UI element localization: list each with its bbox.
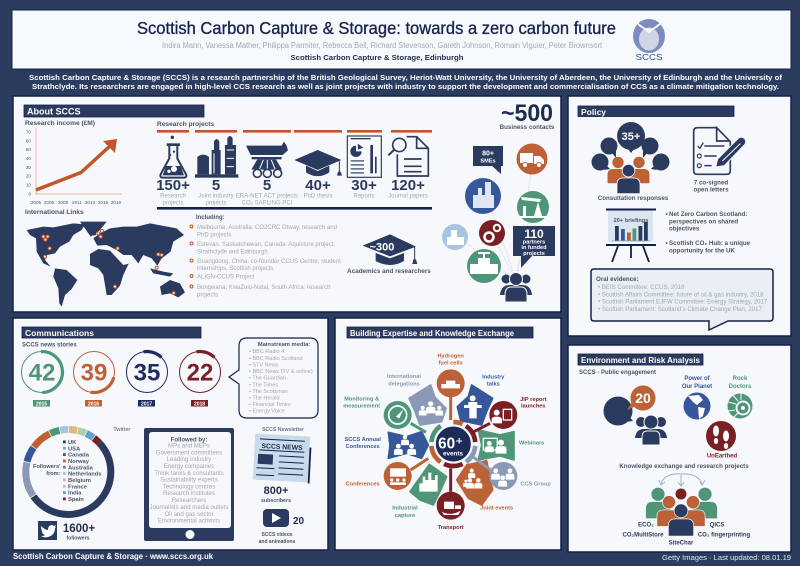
label: news stories: SCCS news stories	[22, 342, 77, 348]
icon: Rock Doctors ammonite: Rock	[733, 376, 748, 382]
petals	[388, 385, 514, 505]
stat: business contacts: Business contacts	[500, 124, 555, 131]
icon: project team	[646, 488, 717, 536]
intro text: Scottish Carbon Capture & Storage (SCCS) is a research partnership of the British Geological Survey, Heriot-Watt University, the University of Aberdeen, the University of Edinburgh and the University of	[29, 73, 782, 82]
labels: research projects: CO₂ fingerprinting	[698, 532, 750, 538]
caption: videos: and animations	[259, 539, 296, 545]
research project numbers and labels: CO₂ SAPLING PCI	[242, 200, 293, 206]
research project numbers and labels: 30+	[351, 177, 377, 194]
news stat 2017: 2017	[141, 401, 152, 407]
research project numbers and labels	[156, 177, 428, 206]
legend: followers by country: from:	[46, 471, 61, 477]
heading: Communications	[22, 327, 201, 338]
label: knowledge exchange: Knowledge exchange and research projects	[619, 463, 749, 470]
icon: tablet with followed-by list	[144, 428, 234, 541]
callout: mainstream media: Mainstream media:	[258, 342, 310, 348]
footer left: source link: Scottish Carbon Capture & Storage · www.sccs.org.uk	[13, 552, 214, 561]
node labels: Transport	[438, 525, 464, 531]
icon: consultation bubbles: 35+	[622, 131, 640, 143]
caption: videos: SCCS videos	[261, 532, 293, 538]
icon: ship and platform	[246, 142, 288, 177]
panel: Policy	[568, 96, 791, 336]
icon: academics cap with count	[347, 234, 431, 275]
line chart: research income: 2015	[98, 200, 109, 205]
text block: including links: Estevan, Saskatchewan, Canada: Aquistore project,	[197, 242, 335, 248]
legend: followers by country: France	[68, 484, 88, 490]
node labels: Webinars	[519, 441, 544, 447]
business contact network	[442, 144, 555, 302]
text block: including links: projects	[197, 292, 218, 298]
heading: International Links: International Links	[25, 209, 84, 216]
text block: including links: internships, Scottish projects	[197, 266, 273, 272]
heading: About SCCS	[24, 105, 204, 117]
stat: twitter followers: followers	[66, 536, 90, 542]
node labels	[343, 353, 551, 531]
research project numbers and labels: projects	[205, 200, 227, 206]
icon: tablet with followed-by list: Think tanks & consultants	[154, 470, 224, 477]
heading: Policy	[578, 106, 734, 117]
icon: engagement bubbles and people: 20	[635, 390, 651, 406]
callout: oral evidence: • Scottish Parliament EJFW Committee: Energy Strategy, 2017	[598, 298, 768, 306]
line chart: research income	[25, 120, 122, 205]
icon: briefing board with bars: 20+ briefings	[614, 218, 648, 224]
line chart: research income: 2013	[85, 200, 96, 205]
node labels: talks	[487, 381, 500, 387]
arrows: project links	[659, 474, 705, 486]
icon: newspaper	[253, 434, 312, 484]
icon: people group	[500, 272, 532, 302]
stat: twitter followers	[63, 523, 95, 542]
callout: mainstream media: • Energy Voice	[249, 408, 285, 414]
node labels: capture	[395, 513, 415, 519]
labels: research projects: CO₂MultiStore	[622, 532, 664, 538]
stat: business contacts: ~500	[501, 100, 553, 127]
callout: mainstream media: • BBC Radio 4	[249, 349, 284, 355]
label: public engagement: SCCS - Public engagement	[579, 370, 656, 376]
node labels: Conferences	[346, 444, 380, 450]
panel: Environment and Risk Analysis	[568, 345, 791, 552]
icon: tablet with followed-by list: Environmental activists	[158, 518, 220, 524]
legend: followers by country: USA	[68, 446, 81, 452]
line chart: research income: 2011	[72, 200, 82, 205]
icon: video play button: 20	[293, 516, 305, 527]
icon: truck circle	[516, 144, 548, 174]
callout: oral evidence: Oral evidence:	[596, 276, 639, 283]
icon: tablet with followed-by list: Government committees	[156, 450, 222, 456]
heading: Policy: Policy	[581, 107, 606, 117]
heading: environment: Environment and Risk Analysis	[581, 356, 701, 365]
labels: research projects: SiteChar	[669, 540, 694, 546]
icon: oil pump circle	[517, 191, 549, 223]
icon: tablet with followed-by list: Sustainability experts	[160, 476, 218, 484]
panel: Communications	[13, 318, 328, 550]
node labels: Hydrogen	[437, 353, 464, 359]
authors: Indira Mann, Vanessa Mather, Philippa Parmiter, Rebecca Bell, Richard Stevenson, Gareth Johnson, Romain Viguier, Peter Brownsort	[162, 41, 603, 50]
line chart: research income: 50	[26, 147, 31, 152]
label: twitter: Twitter	[114, 427, 130, 433]
node labels: Conferences	[346, 482, 380, 488]
icon: graduation cap	[294, 150, 342, 176]
text block: including links: PhD projects	[197, 232, 231, 238]
line chart: research income: 70	[26, 130, 31, 134]
header panel	[12, 10, 791, 69]
affiliation: Scottish Carbon Capture & Storage, Edinburgh	[290, 53, 464, 62]
news stat 2017: 35	[134, 360, 160, 386]
footer right: credits: Getty Images · Last updated: 08.01.19	[662, 553, 791, 562]
caption: open letters	[693, 180, 729, 194]
line chart: research income: 60	[26, 138, 31, 143]
hub diagram: events: events	[443, 451, 463, 458]
icon: Power of Our Planet globe: Our Planet	[682, 384, 712, 390]
callout: oral evidence: • Scottish Parliament: Scotland's Climate Change Plan, 2017	[598, 306, 762, 313]
icon: tablet with followed-by list: Oil and gas sector	[164, 511, 214, 518]
callout: mainstream media: • The Guardian	[249, 376, 286, 382]
research project numbers and labels: 5	[263, 177, 271, 194]
research project numbers and labels: ERA-NET ACT projects	[236, 194, 298, 200]
line chart: research income: 2005	[31, 200, 42, 205]
stat: subscribers: subscribers	[261, 498, 291, 504]
heading: Research projects: Research projects	[157, 121, 215, 128]
news stat 2018: 22	[187, 360, 213, 386]
callout: mainstream media: • Financial Times	[249, 402, 291, 408]
icon: factory circle	[442, 224, 468, 250]
news stat 2015: 2015	[36, 401, 47, 407]
icon: tablet with followed-by list: Researchers	[172, 497, 206, 504]
legend: followers by country: Norway	[68, 459, 90, 465]
line chart: research income: 0	[28, 192, 31, 196]
callout: mainstream media: • The Times	[249, 382, 278, 388]
icon: tablet with followed-by list: Research institutes	[163, 490, 215, 497]
node labels: SCCS Annual	[345, 437, 381, 443]
legend: followers by country	[33, 440, 102, 503]
text block: including links: Bongwana, KwaZulu-Natal, South Africa: research	[197, 285, 330, 291]
legend: followers by country: Belgium	[68, 478, 91, 484]
icon: consultation bubbles	[592, 122, 670, 194]
white icons	[389, 381, 514, 515]
heading: building expertise: Building Expertise and Knowledge Exchange	[350, 329, 514, 338]
legend: followers by country: Netherlands	[68, 472, 102, 478]
icon: tablet with followed-by list: Followed by:	[171, 438, 207, 444]
label: newsletter: SCCS Newsletter	[262, 427, 304, 433]
news stat 2018	[176, 348, 224, 407]
callout: mainstream media: • BBC News (TV & online)	[249, 369, 313, 375]
circle nodes with tails	[411, 397, 491, 492]
icon: tablet with followed-by list: Energy companies	[164, 463, 214, 470]
research project numbers and labels: Joint industry	[198, 194, 234, 200]
icon: Rock Doctors ammonite	[728, 376, 752, 418]
icon: flask	[160, 136, 186, 178]
title: Scottish Carbon Capture & Storage: towards a zero carbon future	[137, 18, 616, 38]
icon: UnEarthed footprints: UnEarthed	[707, 454, 738, 460]
icon: video play button	[263, 509, 305, 527]
panel: Building Expertise and Knowledge Exchange	[335, 318, 561, 550]
center hub	[435, 426, 472, 462]
text block: briefings list: perspectives on shared	[669, 218, 738, 226]
caption: open letters: 7 co-signed	[694, 180, 728, 186]
node labels: fuel cells	[439, 361, 463, 367]
caption: consultation responses: Consultation responses	[598, 195, 669, 202]
research project numbers and labels: Reports	[353, 194, 375, 200]
node labels: delegations	[388, 381, 420, 387]
stat: subscribers	[261, 485, 291, 504]
icon: Rock Doctors ammonite: Doctors	[729, 384, 752, 390]
icon: UnEarthed footprints	[706, 421, 738, 460]
node labels: CCS Group	[520, 482, 551, 488]
icon: gears circle	[479, 220, 505, 246]
icon: twitter bird	[38, 521, 57, 540]
icon: tablet with followed-by list: Journalists and media outlets	[150, 504, 228, 511]
line chart: research income: 10	[26, 183, 31, 188]
stat: twitter followers: 1600+	[63, 523, 95, 535]
icon: Power of Our Planet globe: Power of	[684, 376, 711, 382]
icon: briefing board with bars	[606, 208, 656, 262]
line chart: research income: Research income (£M)	[25, 120, 95, 127]
inner ring	[431, 422, 475, 466]
node labels: Industry	[482, 374, 505, 380]
node labels: JIP report	[520, 397, 547, 403]
research project numbers and labels: Journal papers	[388, 194, 428, 200]
icon: tablet with followed-by list: MPs and MEPs	[168, 442, 210, 450]
icon: tablet with followed-by list: Technology centres	[163, 484, 215, 490]
text block: including links: Melbourne, Australia: CO2CRC Otway, research and	[197, 225, 337, 231]
text block: including links: Strathclyde and Edinburgh	[197, 250, 268, 256]
legend: followers by country: Followers'	[33, 464, 61, 470]
legend: followers by country: Spain	[68, 497, 84, 503]
icon: engagement bubbles and people	[604, 385, 667, 445]
callout: 110 partners	[513, 226, 555, 268]
text block: briefings list	[666, 211, 751, 254]
callout: mainstream media: • BBC Radio Scotland	[249, 356, 303, 362]
caption: open letters: open letters	[693, 186, 729, 194]
icon: valve circle	[467, 249, 501, 283]
callout: oral evidence	[591, 269, 773, 330]
callout: 110 partners: in funded	[521, 245, 547, 251]
hub diagram: events	[343, 353, 551, 531]
research project numbers and labels: Research	[160, 194, 186, 200]
hub diagram: events: 60⁺	[438, 435, 463, 452]
legend: followers by country: India	[68, 491, 82, 497]
line chart: research income: 20	[26, 174, 31, 179]
news stat 2018: 2018	[194, 401, 205, 407]
legend: followers by country: UK	[68, 440, 77, 446]
panel: About SCCS	[13, 96, 561, 312]
text block: including links	[190, 215, 341, 298]
research project numbers and labels: projects	[162, 200, 184, 206]
legend: followers by country: Australia	[68, 465, 94, 471]
text block: briefings list: •	[666, 211, 668, 218]
icon: signed letter and pencil	[694, 128, 746, 174]
callout: mainstream media: • The Herald	[249, 396, 280, 402]
node labels: International	[387, 374, 421, 380]
icon: SCCS logo: SCCS	[636, 52, 663, 62]
stat: subscribers: 800+	[264, 485, 288, 497]
callout: oral evidence: • Scottish Affairs Committee: future of oil & gas industry, 2018	[598, 292, 764, 298]
text block: including links: ALIGN-CCUS Project	[197, 274, 255, 280]
node labels: launches	[521, 404, 546, 410]
line chart: research income: 2018	[111, 200, 122, 205]
heading: Communications: Communications	[25, 328, 94, 338]
icon: Power of Our Planet globe	[682, 376, 712, 420]
text block: briefings list: objectives	[669, 226, 700, 232]
world map with pins	[27, 222, 185, 307]
node labels: Monitoring &	[344, 396, 379, 402]
text block: briefings list: opportunity for the UK	[669, 248, 736, 254]
callout: 110 partners: projects	[523, 251, 545, 257]
labels: research projects: QICS	[710, 522, 724, 528]
icon: academics cap with count: Academics and researchers	[347, 268, 431, 275]
intro text	[29, 73, 782, 91]
node labels: measurement	[343, 403, 380, 409]
callout: mainstream media	[229, 338, 318, 418]
icon: plant circle	[465, 178, 501, 214]
news stat 2017	[123, 348, 171, 407]
research project numbers and labels: 150+	[156, 177, 190, 194]
callout: 80+ SMEs: 80+	[482, 150, 494, 158]
line chart: research income: 30	[26, 165, 31, 170]
icon: report	[347, 136, 381, 177]
text block: briefings list: Net Zero Carbon Scotland:	[669, 211, 747, 218]
icon: SCCS logo	[633, 19, 665, 62]
icon: journal paper and magnifier	[388, 137, 428, 176]
news stat 2015: 42	[29, 360, 55, 386]
donut chart: twitter followers	[26, 430, 111, 514]
text block: briefings list: •	[666, 240, 668, 247]
icon: academics cap with count: ~300	[370, 242, 394, 254]
callout: 80+ SMEs	[473, 146, 503, 174]
text block: including links: Guangdong, China: co-founder CCUS Centre, student	[197, 259, 341, 265]
callout: 80+ SMEs: SMEs	[480, 158, 496, 164]
icon: newspaper: SCCS NEWS	[261, 443, 303, 452]
line chart: research income: 2009	[58, 200, 69, 205]
intro text: Strathclyde. Its researchers are engaged in high-level CCS research as well as joint projects with industry to support the development and commercialisation of CCS as a climate mitigation technology.	[32, 82, 779, 91]
callout: 110 partners: partners	[523, 240, 545, 246]
research project numbers and labels: 40+	[305, 177, 331, 194]
callout: mainstream media: • The Scotsman	[249, 389, 288, 395]
icon: refinery	[195, 136, 238, 178]
research project numbers and labels: 5	[212, 177, 220, 194]
callout: 110 partners: 110	[524, 227, 544, 241]
labels: research projects	[622, 522, 750, 546]
icon: tablet with followed-by list: Leading industry	[167, 456, 212, 463]
text block: including links: Including:	[196, 215, 225, 221]
heading: About SCCS: About SCCS	[27, 106, 80, 116]
news stat 2016: 39	[81, 360, 107, 386]
labels: research projects: ECO₂	[638, 522, 654, 528]
node labels: Joint events	[480, 506, 513, 512]
text block: briefings list: Scottish CO₂ Hub: a unique	[669, 240, 751, 247]
line chart: research income: 2005	[44, 200, 55, 205]
research project numbers and labels: 120+	[391, 177, 425, 194]
news stat 2016	[69, 347, 119, 407]
news stat 2016: 2016	[88, 401, 99, 407]
callout: mainstream media: • STV News	[249, 362, 279, 368]
callout: oral evidence: • BEIS Committee: CCUS, 2018	[598, 284, 685, 291]
caption: videos	[259, 532, 296, 545]
node labels: Industrial	[392, 506, 418, 512]
research project numbers and labels: PhD thesis	[303, 194, 333, 200]
legend: followers by country: Canada	[68, 453, 90, 459]
news stat 2015	[20, 350, 64, 407]
line chart: research income: 40	[26, 156, 31, 161]
